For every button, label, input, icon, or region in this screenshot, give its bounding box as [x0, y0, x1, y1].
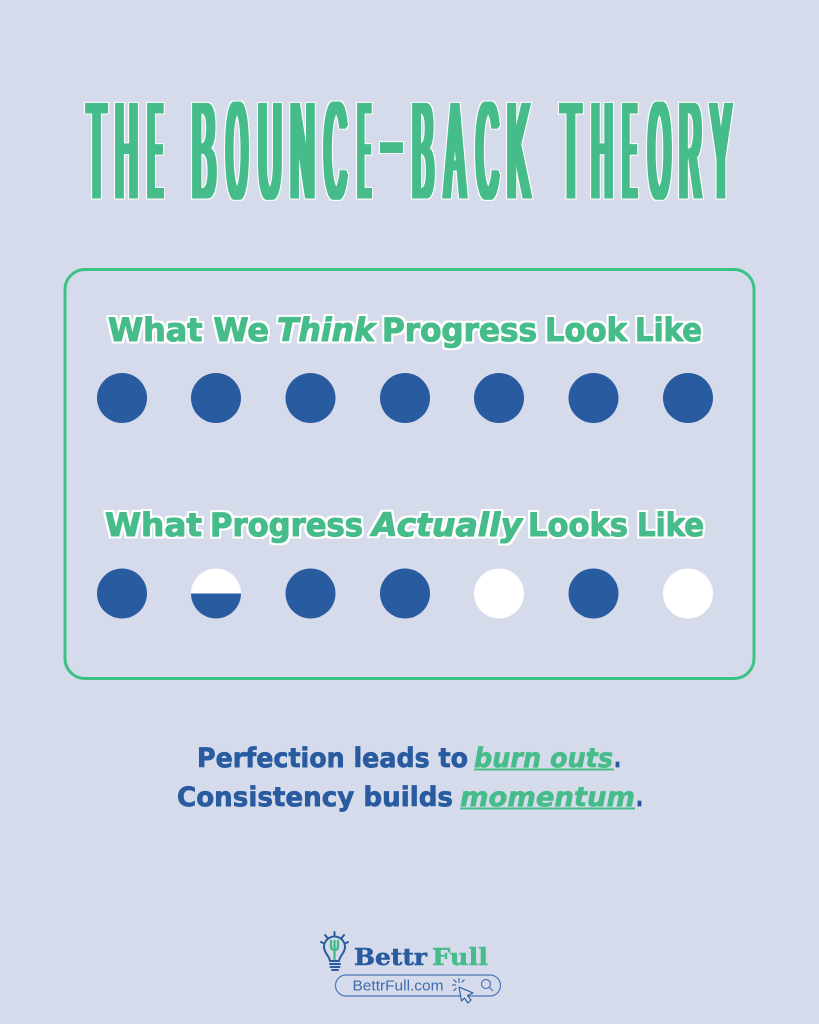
title: T: [561, 74, 581, 228]
icon: light bulb with fork: [321, 932, 348, 970]
title: C: [476, 74, 498, 228]
title: H: [116, 74, 137, 228]
heading: what we think: Like: [635, 311, 702, 349]
closing statement: momentum: [460, 782, 635, 813]
text: Y: [711, 74, 731, 228]
closing statement: .: [636, 782, 643, 813]
heading: what we think: Think: [277, 311, 377, 349]
title: B: [192, 74, 216, 228]
search bar: BettrFull.com: [352, 978, 444, 994]
title: E: [148, 74, 162, 228]
closing statement: burn outs: [474, 743, 613, 774]
icon: cursor arrow: [459, 987, 473, 1003]
title: E: [359, 74, 370, 228]
heading: what actually happens: Actually: [369, 506, 523, 544]
heading: what we think: What We: [108, 311, 269, 349]
heading: what actually happens: Like: [637, 506, 704, 544]
icon: click burst: [452, 978, 464, 991]
title: R: [680, 74, 701, 228]
heading: what we think: Progress: [382, 311, 537, 349]
brand name: Full: [432, 944, 488, 971]
panel border: [65, 270, 754, 678]
dot row: expected progress: [97, 373, 713, 423]
title: B: [412, 74, 434, 228]
title: U: [259, 74, 281, 228]
logo: Bettr Full: [321, 932, 500, 1003]
title: O: [227, 74, 247, 228]
closing statement: .: [614, 743, 621, 774]
title: A: [445, 74, 465, 228]
title: O: [649, 74, 670, 228]
title: T: [87, 74, 106, 228]
brand name: Bettr: [354, 944, 428, 971]
title: E: [624, 74, 636, 228]
heading: what actually happens: Looks: [528, 506, 628, 544]
closing statement: Perfection leads to: [197, 743, 468, 774]
icon: magnifier: [482, 980, 493, 991]
panel: progress comparison: [65, 270, 754, 678]
title: H: [592, 74, 612, 228]
closing statement: [177, 743, 643, 813]
search bar: [336, 975, 500, 1003]
heading: what we think: Look: [545, 311, 628, 349]
title: -: [380, 60, 403, 214]
title: C: [324, 74, 346, 228]
title: K: [507, 74, 530, 228]
dot row: actual progress: [97, 568, 713, 618]
heading: what actually happens: Progress: [210, 506, 363, 544]
closing statement: Consistency builds: [177, 782, 453, 813]
heading: what actually happens: What: [105, 506, 202, 544]
title: N: [290, 74, 314, 228]
